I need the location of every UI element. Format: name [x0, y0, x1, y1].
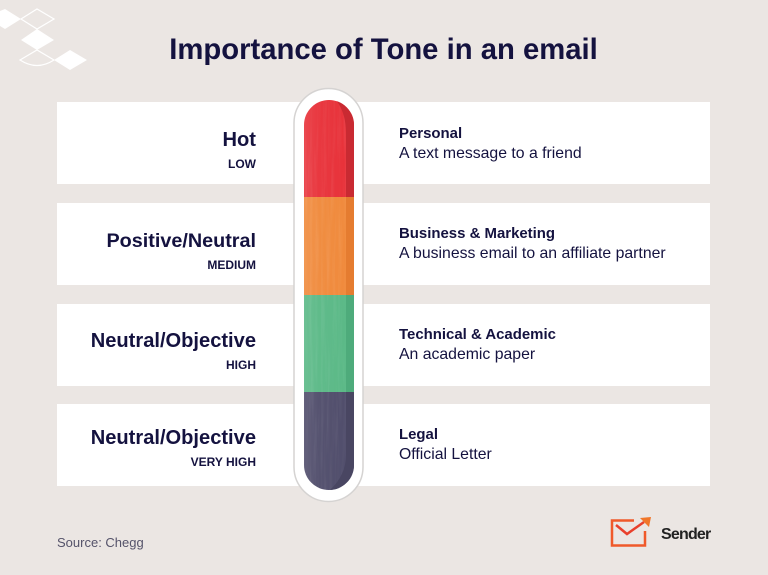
thermometer scale: [293, 88, 364, 502]
left label: Neutral/Objective: Neutral/Objective: [91, 427, 256, 449]
title: Importance of Tone in an email: [169, 34, 598, 66]
panel: row 4: [57, 404, 710, 486]
right text: A business email to an affiliate partner: [399, 245, 666, 262]
right text: A text message to a friend: [399, 145, 582, 162]
level: low: LOW: [228, 157, 256, 171]
logo text: Sender: [661, 526, 710, 543]
panel: row 3: [57, 304, 710, 386]
right heading: Personal: Personal: [399, 125, 462, 142]
right heading: Legal: Legal: [399, 426, 438, 443]
right text: An academic paper: [399, 346, 535, 363]
source: Source: Chegg: [57, 535, 144, 550]
right text: Official Letter: [399, 446, 492, 463]
level: high: HIGH: [226, 358, 256, 372]
decorative diamonds: [0, 8, 86, 70]
left label: Positive/Neutral: Positive/Neutral: [106, 230, 256, 252]
left label: Hot: Hot: [223, 129, 256, 151]
right heading: Technical: Technical & Academic: [399, 326, 556, 343]
panel: row 2: [57, 203, 710, 285]
icon: sender logo: [610, 517, 651, 547]
right heading: Business: Business & Marketing: [399, 225, 555, 242]
panel: row 1: [57, 102, 710, 184]
level: medium: MEDIUM: [207, 258, 256, 272]
level: very high: VERY HIGH: [191, 455, 256, 469]
left label: Neutral/Objective: Neutral/Objective: [91, 330, 256, 352]
